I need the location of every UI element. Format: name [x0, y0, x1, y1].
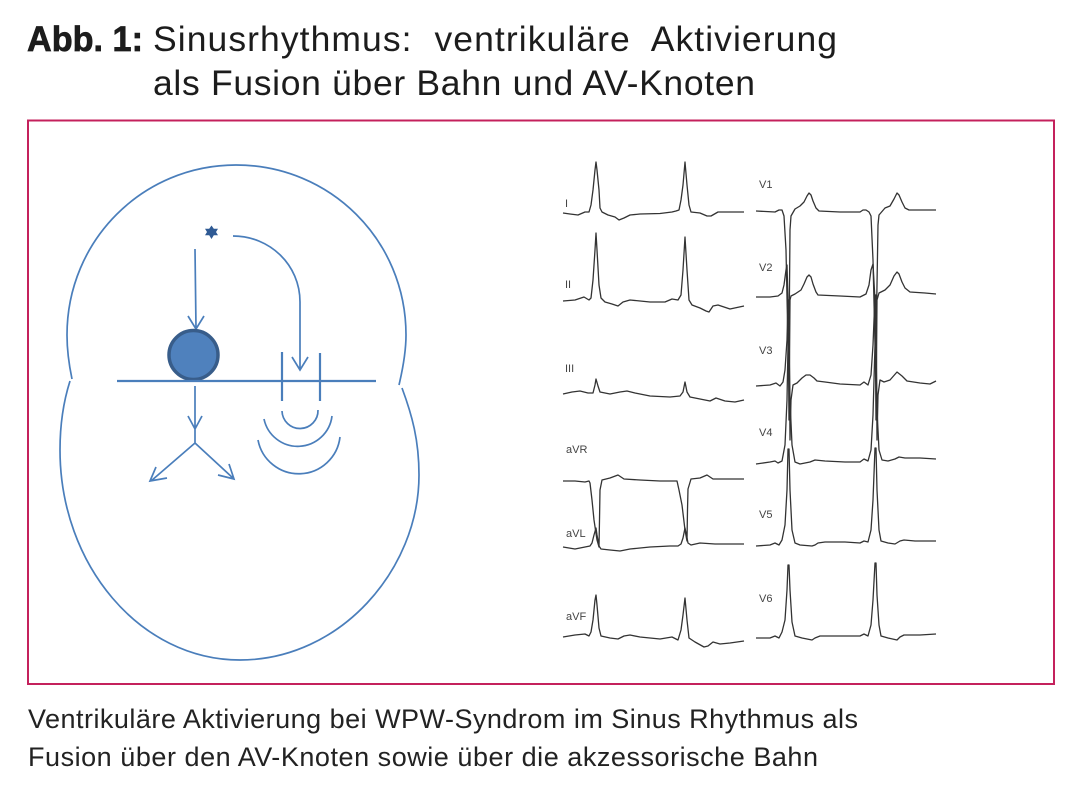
caption: Ventrikuläre Aktivierung bei WPW-Syndrom im Sinus Rhythmus als — [28, 704, 858, 734]
lead III: III — [565, 363, 574, 375]
lead aVL: aVL — [566, 528, 586, 540]
lead II — [563, 233, 744, 312]
icon: sinus node star — [205, 226, 218, 239]
lead I: I — [565, 198, 568, 210]
panel: figure frame — [28, 120, 1054, 684]
lead III — [563, 363, 744, 402]
lead V2: V2 — [759, 262, 772, 274]
title — [27, 19, 837, 103]
accessory pathway bars — [282, 352, 320, 401]
lead I — [563, 162, 744, 220]
AV plane line — [117, 380, 376, 382]
lead aVL — [563, 528, 744, 551]
arrow: AV node downward with branches — [150, 386, 234, 481]
lead V6: V6 — [759, 593, 772, 605]
arrow: curved to accessory pathway — [233, 236, 308, 370]
arrow: sinus node to AV node — [188, 249, 204, 329]
lead V4 — [756, 345, 936, 464]
lead V5: V5 — [759, 509, 772, 521]
title: Sinusrhythmus: ventrikuläre Aktivierung — [153, 19, 837, 59]
caption: Fusion über den AV-Knoten sowie über die akzessorische Bahn — [28, 742, 818, 772]
AV node circle — [169, 330, 218, 380]
lead V3 — [756, 295, 936, 440]
lead V1: V1 — [759, 179, 772, 191]
lead V6 — [756, 563, 936, 640]
title: als Fusion über Bahn und AV-Knoten — [153, 63, 755, 103]
ventricular activation wavefronts — [258, 410, 340, 474]
lead aVF — [563, 595, 744, 647]
lead aVF: aVF — [566, 611, 586, 623]
lead V1 — [756, 179, 936, 345]
lead V2 — [756, 262, 936, 420]
ECG: chest leads — [756, 179, 936, 640]
caption — [28, 704, 858, 772]
heart outline: ventricles — [60, 381, 419, 660]
lead V4: V4 — [759, 427, 772, 439]
ECG: limb leads — [563, 162, 744, 647]
lead V5 — [756, 448, 936, 546]
lead aVR — [563, 444, 744, 547]
diagram: WPW heart schematic — [60, 165, 419, 660]
title: Abb. 1: — [27, 20, 143, 59]
heart outline: atria — [67, 165, 406, 385]
lead V3: V3 — [759, 345, 772, 357]
lead aVR: aVR — [566, 444, 587, 456]
lead II: II — [565, 279, 571, 291]
